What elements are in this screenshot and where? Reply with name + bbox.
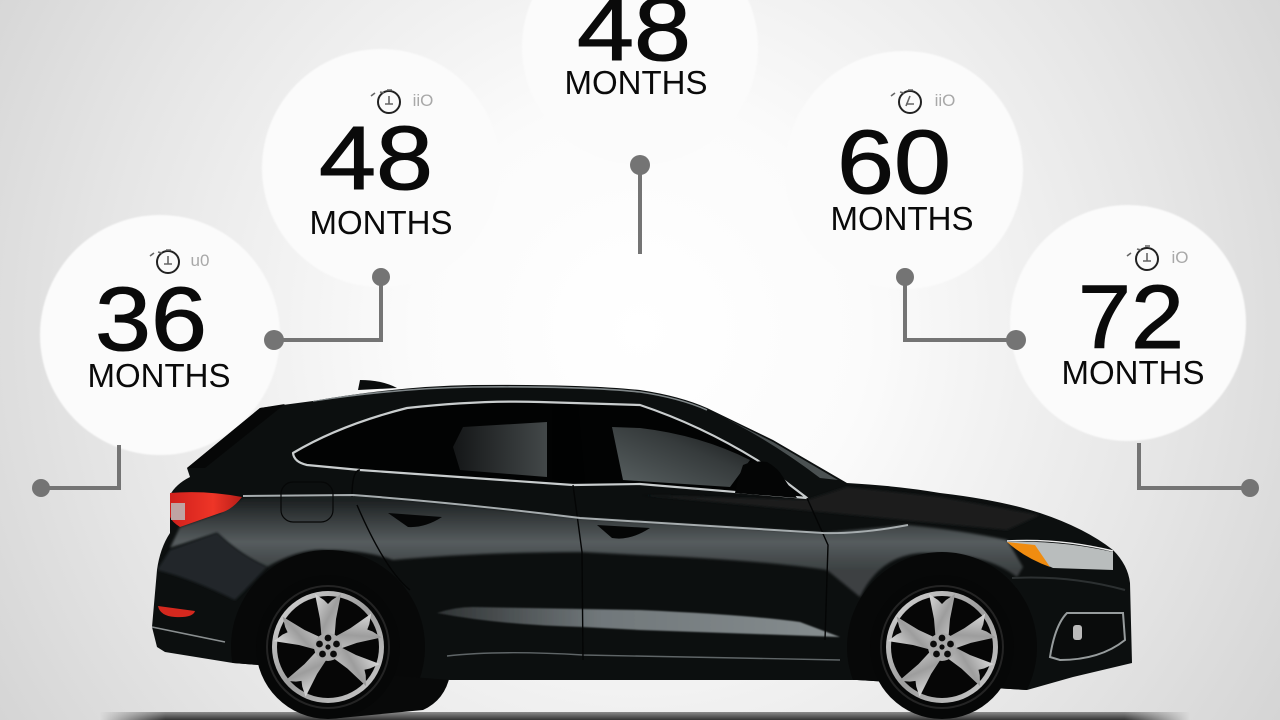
headlamp xyxy=(1007,542,1113,570)
circle: 48 months top xyxy=(522,0,758,165)
unit 60: MONTHS xyxy=(830,200,974,237)
front bumper trim line xyxy=(1012,578,1125,590)
circle: 48 months left xyxy=(262,49,500,287)
ground shadow xyxy=(100,712,1190,720)
tail lamp xyxy=(170,492,242,527)
rear reflector xyxy=(158,606,195,617)
pillar xyxy=(552,404,585,483)
sill highlight xyxy=(437,607,840,637)
fog lamp surround xyxy=(1050,613,1125,660)
body shading xyxy=(157,387,1125,720)
leader: 72 months xyxy=(1139,443,1259,497)
wheel arches xyxy=(232,550,354,665)
roof highlight xyxy=(313,387,707,410)
rear door glass xyxy=(453,422,547,477)
crease highlight xyxy=(243,495,908,533)
side mirror xyxy=(735,461,797,498)
leader: 36 months xyxy=(32,445,119,497)
circle: 36 months xyxy=(40,215,280,455)
rear wheel xyxy=(256,575,400,719)
unit 72: MONTHS xyxy=(1062,354,1204,391)
door handles xyxy=(388,513,650,539)
tail lamp lens xyxy=(171,503,185,520)
rear bumper shade xyxy=(157,533,267,600)
fuel door xyxy=(281,482,333,522)
unit 48 top: MONTHS xyxy=(564,64,708,101)
number 72: 72 xyxy=(1078,268,1184,368)
leader: 48 months left xyxy=(264,268,390,350)
icon: stopwatch 72 xyxy=(1127,246,1158,270)
front door glass xyxy=(612,427,750,487)
second rear tire shadow xyxy=(330,650,450,718)
fog lamp xyxy=(1073,625,1082,640)
shoulder band xyxy=(640,487,1040,530)
indicator xyxy=(1007,542,1050,567)
rear quarter glass xyxy=(187,404,285,468)
headlamp brow xyxy=(1007,540,1113,551)
leader: 48 months top xyxy=(630,155,650,254)
car body xyxy=(152,385,1132,690)
number 36: 36 xyxy=(95,270,207,370)
front wheel xyxy=(870,575,1014,719)
side sheen xyxy=(170,495,1023,597)
rocker trim xyxy=(447,653,840,660)
number 48: 48 xyxy=(319,109,433,209)
black car illustration xyxy=(152,380,1132,720)
small label 48: iiO xyxy=(413,91,433,110)
circle: 72 months xyxy=(1010,205,1246,441)
windshield glass xyxy=(715,413,838,480)
unit 48: MONTHS xyxy=(310,204,452,241)
spoiler xyxy=(358,380,397,390)
circle: 60 months xyxy=(785,51,1023,289)
unit 36: MONTHS xyxy=(88,357,230,394)
small label 72: iO xyxy=(1172,248,1188,267)
windows xyxy=(293,402,807,498)
door shut lines xyxy=(352,470,828,660)
icon: stopwatch 48 xyxy=(371,90,400,113)
number 60: 60 xyxy=(837,113,951,213)
icon: stopwatch 36 xyxy=(150,250,179,273)
icon: stopwatch 60 xyxy=(891,90,921,113)
leader: 60 months xyxy=(896,268,1026,350)
small label 36: u0 xyxy=(191,251,209,270)
small label 60: iiO xyxy=(935,91,955,110)
rear bumper trim xyxy=(152,627,225,642)
